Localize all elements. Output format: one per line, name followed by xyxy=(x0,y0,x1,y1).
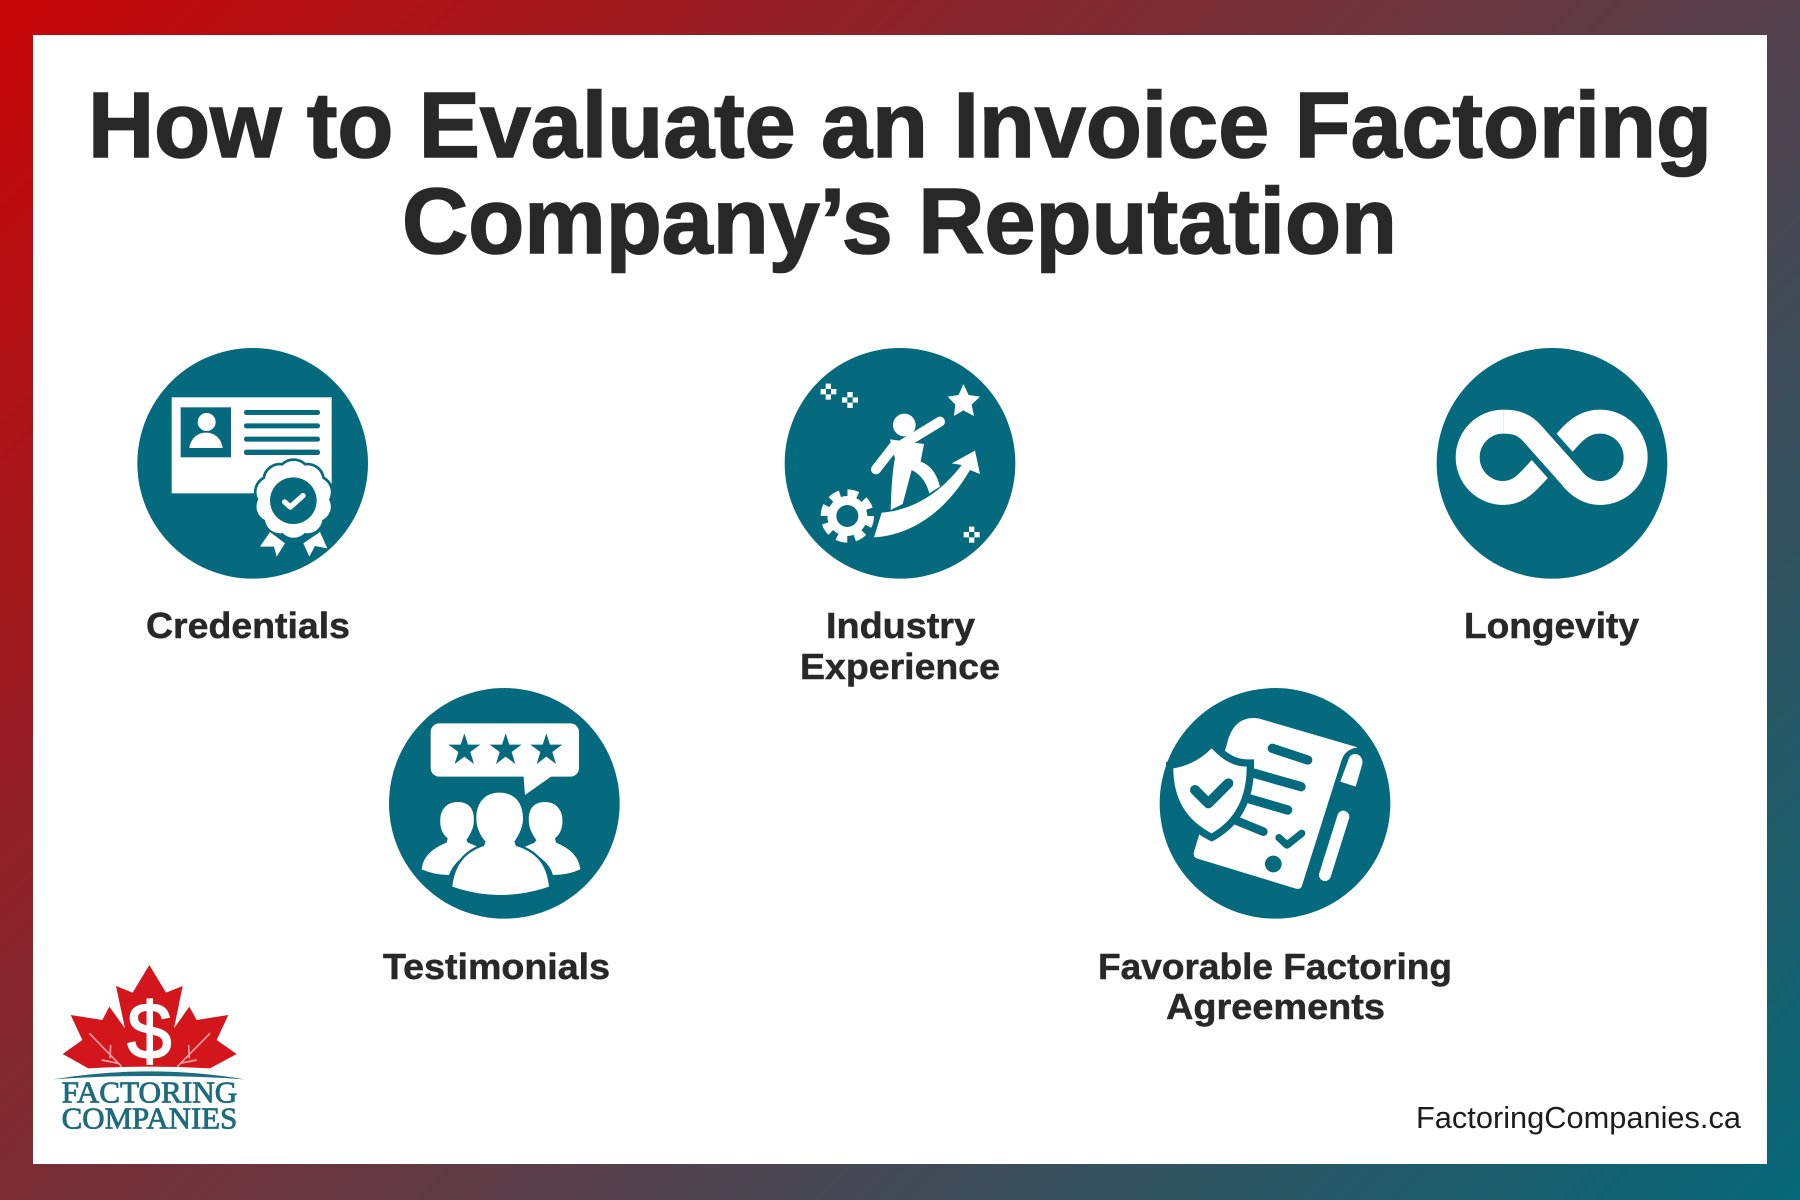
title: Company’s Reputation xyxy=(402,169,1397,273)
item: credentials xyxy=(137,348,368,646)
label: testimonials: Testimonials xyxy=(383,946,610,987)
icon: infinity symbol xyxy=(1437,348,1667,579)
item: favorable factoring agreements xyxy=(1098,688,1452,1027)
label: favorable factoring agreements xyxy=(1098,946,1452,1027)
label: favorable factoring agreements: Favorable Factoring xyxy=(1098,946,1452,987)
dollar sign: $ xyxy=(127,986,172,1075)
icon: document with shield and pen xyxy=(1160,688,1390,919)
logo wordmark: FACTORING xyxy=(62,1076,237,1110)
label: longevity: Longevity xyxy=(1464,605,1639,646)
label: industry experience: Industry xyxy=(826,605,975,646)
label: credentials: Credentials xyxy=(146,605,350,646)
icon: people with star rating bubble xyxy=(389,688,620,919)
logo wordmark: COMPANIES xyxy=(62,1101,237,1135)
title xyxy=(88,73,1712,273)
icon: climber with arrow and gear xyxy=(785,348,1015,579)
label: favorable factoring agreements: Agreements xyxy=(1166,986,1385,1027)
swoosh xyxy=(53,1071,245,1079)
label: industry experience xyxy=(800,605,1000,687)
icon: credential card with badge xyxy=(137,348,368,579)
icon: maple leaf xyxy=(63,965,237,1068)
website url: FactoringCompanies.ca xyxy=(1416,1101,1741,1135)
logo: factoring companies xyxy=(53,965,245,1135)
item: industry experience xyxy=(785,348,1015,687)
title: How to Evaluate an Invoice Factoring xyxy=(88,73,1712,177)
label: industry experience: Experience xyxy=(800,646,1000,687)
item: longevity xyxy=(1437,348,1667,646)
leaf veins xyxy=(89,1033,210,1067)
logo wordmark xyxy=(62,1076,237,1135)
item: testimonials xyxy=(383,688,620,987)
